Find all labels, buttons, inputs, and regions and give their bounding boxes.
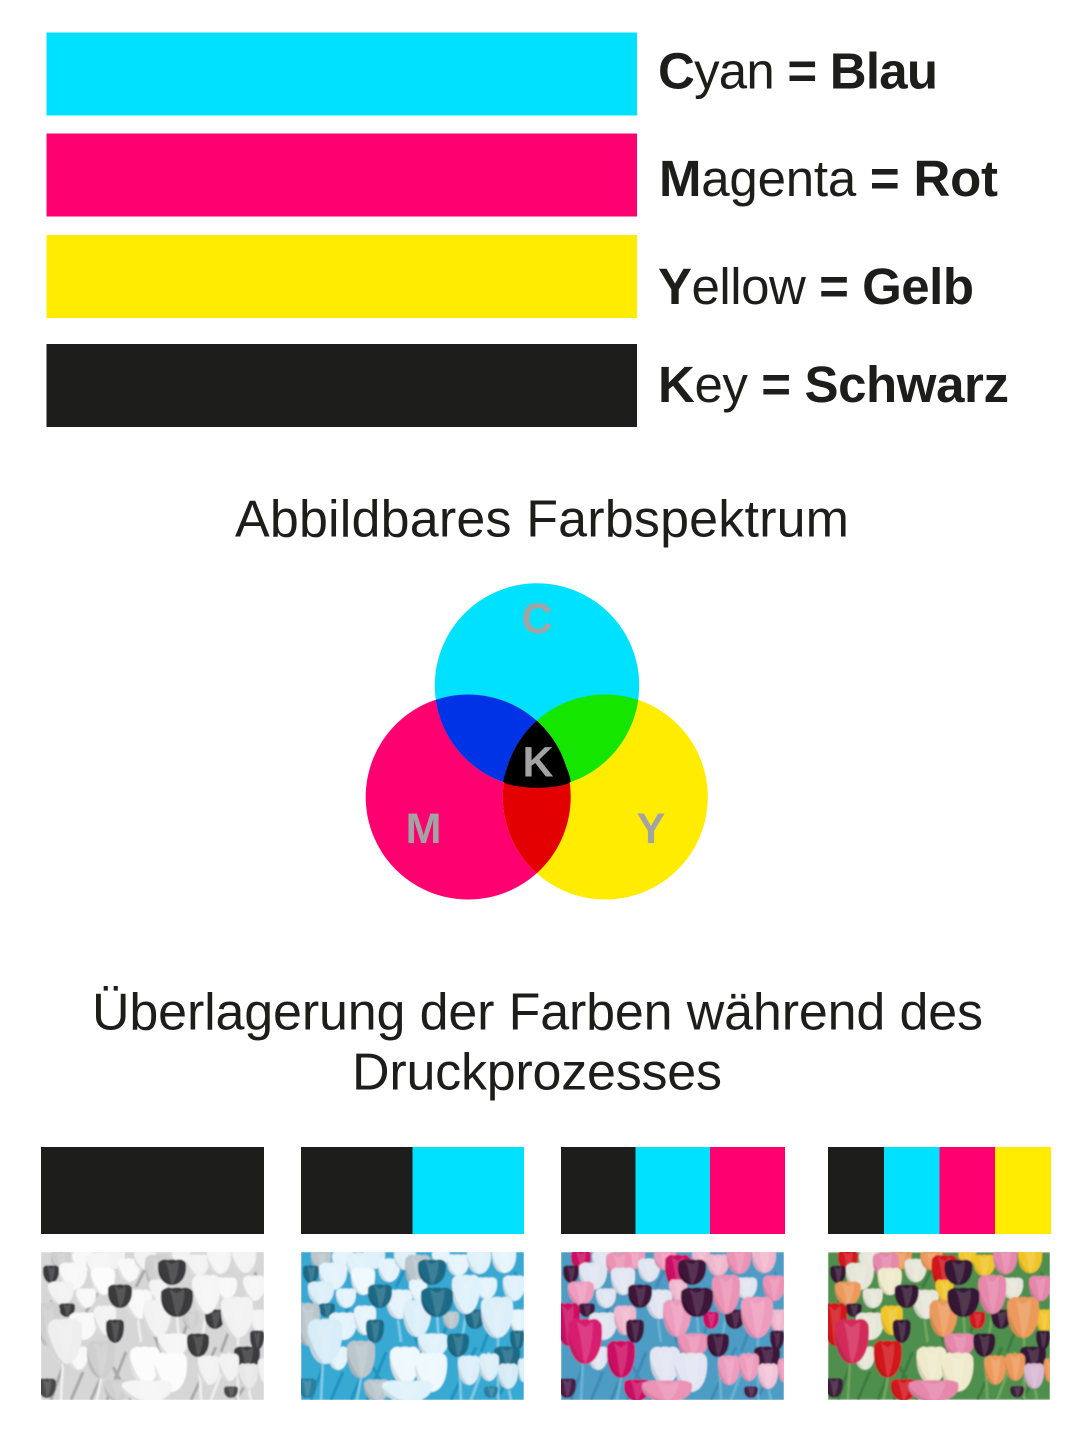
colour bar: key black [46,344,637,427]
circle: yellow [503,694,708,900]
colour bar: cyan [46,32,637,116]
diagram: CMY colour overlap [366,583,708,900]
overlap: green [506,694,638,782]
swatch: K + C + M [561,1147,785,1234]
swatch: K + C + M + Y [828,1147,1051,1234]
letter Y: Y [637,805,665,853]
overlap: red [502,720,571,874]
circle: cyan [435,583,639,788]
overlap: blue [436,694,537,782]
circle: magenta [366,694,571,900]
heading: colour spectrum: Abbildbares Farbspektrum [235,490,849,548]
colour bar: magenta [46,134,637,216]
photo: tulips, full colour [828,1252,1050,1400]
heading: overlay of colours during printing: Druckprozesses [352,1044,722,1102]
letter K: K [522,738,554,786]
overlap: black centre [504,720,570,788]
label: cyan: Cyan = Blau [658,42,938,100]
letter M: M [406,805,441,853]
label: magenta: Magenta = Rot [659,150,998,207]
label: yellow: Yellow = Gelb [658,258,974,315]
colour bar: yellow [46,235,637,318]
heading: overlay of colours during printing [92,984,983,1102]
photo: tulips, black, cyan and magenta [561,1252,784,1400]
letter C: C [521,595,553,643]
swatch: K + C [301,1147,524,1234]
heading: overlay of colours during printing: Überlagerung der Farben während des [92,984,983,1042]
photo: tulips, black and cyan [301,1252,524,1400]
label: key: Key = Schwarz [658,356,1009,413]
swatch: K [41,1147,264,1234]
photo: tulips, black only [41,1252,264,1400]
